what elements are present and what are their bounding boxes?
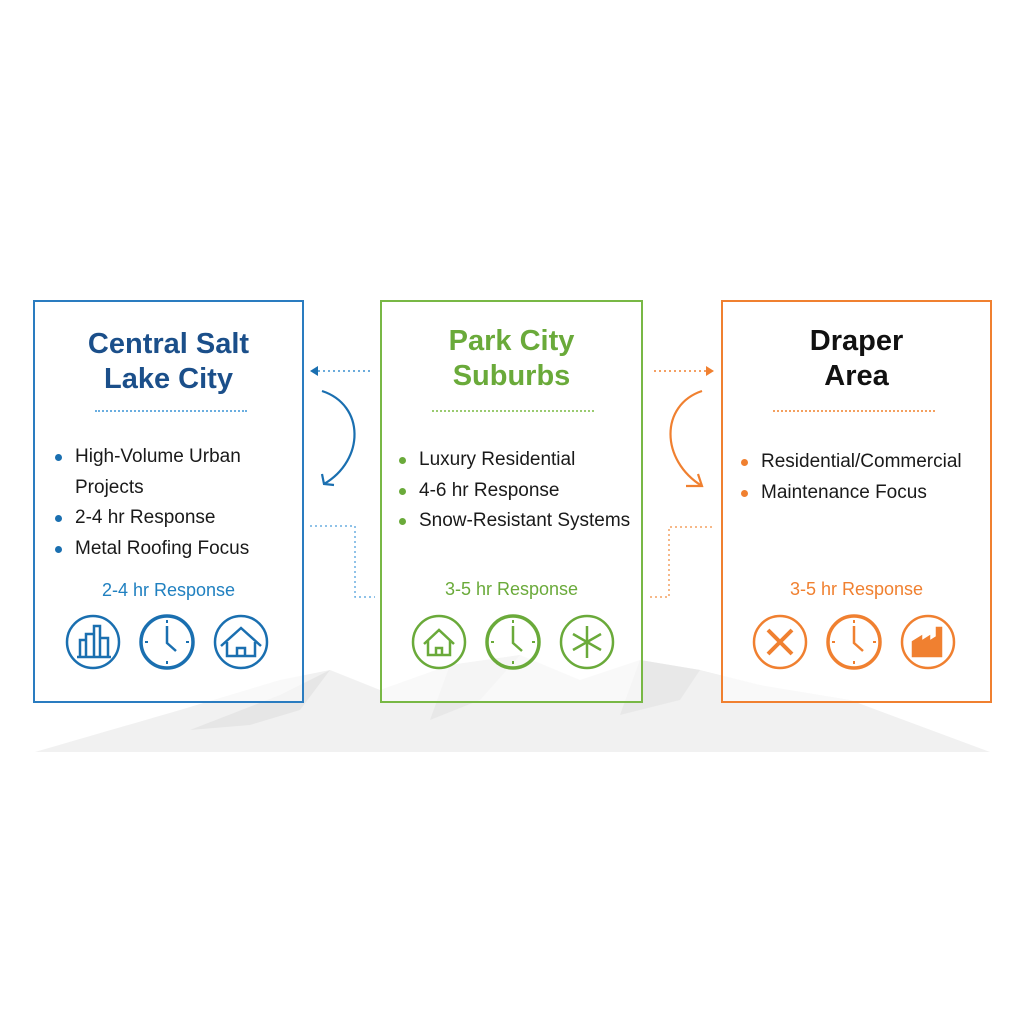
icons row	[752, 614, 956, 670]
bullet list: 4-6 hr Response	[419, 480, 559, 500]
bullet list: Maintenance Focus	[761, 482, 927, 502]
heading: Suburbs	[453, 360, 570, 392]
bullet list	[741, 451, 962, 502]
heading	[810, 325, 903, 392]
response label: 2-4 hr Response	[102, 580, 235, 600]
connector: blue dotted	[310, 526, 375, 597]
heading: Park City	[449, 325, 574, 357]
arrow: dotted left	[310, 366, 370, 376]
panel: Central Salt Lake City	[33, 300, 304, 703]
panel: Park City Suburbs	[380, 300, 643, 703]
icons row	[66, 614, 268, 670]
response label: 3-5 hr Response	[445, 579, 578, 599]
connector: green/orange dotted	[650, 527, 715, 597]
bullet list: Projects	[75, 476, 144, 498]
bullet list	[55, 446, 249, 558]
panel: Draper Area	[721, 300, 992, 703]
arrow: curved orange	[670, 391, 702, 486]
mountains background	[36, 655, 989, 752]
icons row	[412, 614, 614, 670]
bullet list: Luxury Residential	[419, 449, 575, 470]
heading: Central Salt	[88, 328, 249, 360]
heading: Area	[824, 360, 889, 392]
heading: Lake City	[104, 363, 233, 395]
heading	[449, 325, 574, 392]
bullet list	[399, 449, 630, 531]
bullet list: High-Volume Urban	[75, 446, 241, 467]
bullet list: Residential/Commercial	[761, 451, 962, 472]
bullet list: 2-4 hr Response	[75, 507, 215, 528]
bullet list: Metal Roofing Focus	[75, 538, 249, 558]
arrow: curved blue	[322, 391, 355, 485]
heading: Draper	[810, 325, 903, 357]
heading	[88, 328, 249, 395]
arrow: dotted right	[654, 366, 714, 376]
bullet list: Snow-Resistant Systems	[419, 510, 630, 531]
response label: 3-5 hr Response	[790, 579, 923, 599]
